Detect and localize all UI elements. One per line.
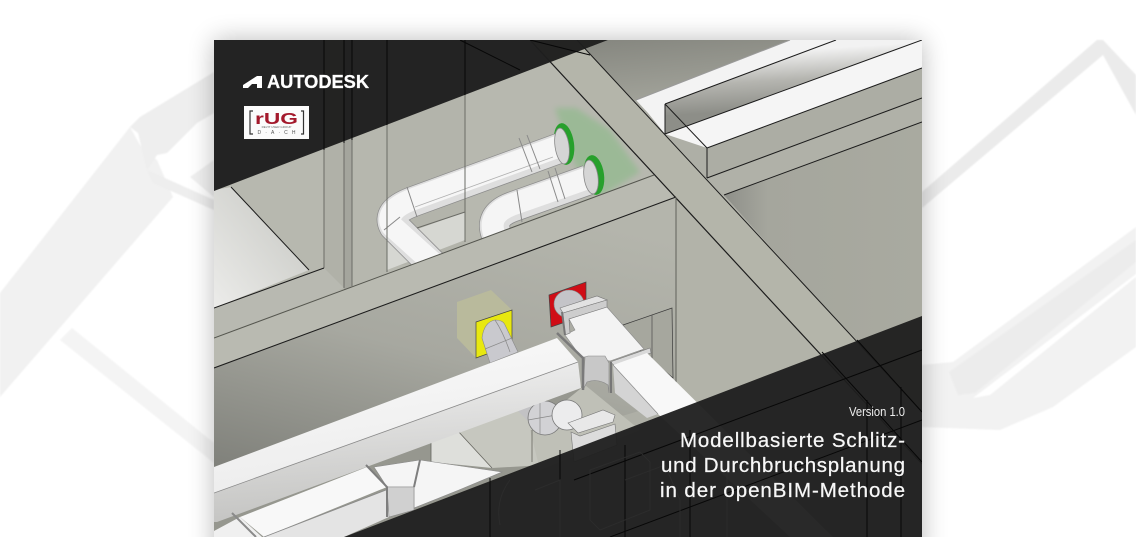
cover shadow: [214, 40, 922, 537]
upper right white ducts: [636, 40, 922, 148]
logo: RUG: REVIT USER GROUP: [262, 125, 291, 129]
lower pipe elbow: [528, 400, 582, 436]
lower fitting collar: [568, 410, 616, 450]
pipe upper: [384, 127, 571, 264]
upper right dark recess: [586, 40, 788, 102]
main duct: [214, 338, 581, 522]
title: Modellbasierte Schlitz-: [680, 429, 905, 452]
ghost duct forms in the bottom banner: [560, 454, 728, 537]
diagonal beam: [578, 49, 634, 108]
lines on dark banners: [324, 40, 922, 537]
T fitting: [557, 296, 651, 393]
background: blurred product shapes right: [922, 40, 1136, 430]
green ring lower: [584, 155, 604, 195]
background: blurred product shapes left: [0, 72, 214, 463]
green glow around openings: [555, 108, 640, 197]
logo: RUG: rUG: [255, 111, 298, 128]
lower duct: [214, 460, 502, 537]
wordmark: AUTODESK: [267, 72, 369, 92]
green ring upper: [554, 123, 574, 165]
right large wall: [724, 163, 818, 298]
central wall below ledge: [214, 330, 638, 467]
pipe lower: [493, 159, 600, 236]
version label: Version 1.0: [849, 405, 905, 419]
title: in der openBIM-Methode: [660, 479, 905, 502]
wall area under main duct: [214, 385, 640, 537]
title: und Durchbruchsplanung: [661, 454, 905, 477]
title: [660, 429, 905, 502]
rear wall niche: [222, 62, 653, 310]
logo: Autodesk: [243, 72, 369, 92]
ledge top face: [346, 190, 614, 290]
cover illustration: BIM model: [214, 40, 922, 537]
red opening: [549, 282, 586, 327]
rear box behind fitting: [623, 308, 673, 378]
yellow opening: [457, 290, 518, 363]
icon: Autodesk A: [243, 76, 262, 88]
side wall right of corner: [676, 197, 922, 537]
left floor ledge: [324, 268, 344, 290]
logo: RUG: [244, 106, 309, 139]
model lines: [214, 40, 922, 382]
cover page: [214, 40, 922, 537]
right duct branch: [612, 353, 697, 418]
logo: RUG: D·A·CH: [258, 130, 296, 136]
top dark banner: [214, 40, 608, 191]
bottom dark banner: [344, 316, 922, 537]
left floor: [214, 187, 309, 308]
